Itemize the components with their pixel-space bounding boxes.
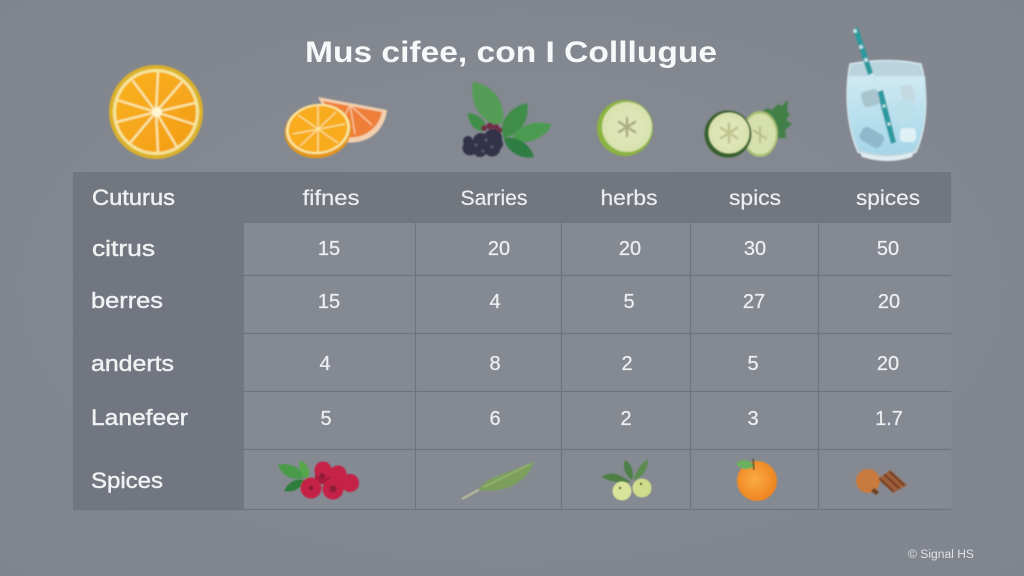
row: citrus	[92, 236, 899, 261]
icon: rosemary sprig	[462, 461, 534, 499]
icon: raspberries	[278, 460, 359, 500]
icon: orange fruit	[736, 459, 777, 501]
row: berres: berres	[91, 288, 163, 313]
header labels: spices	[856, 187, 920, 210]
row: Lanefeer: 2	[620, 408, 632, 430]
row: Lanefeer: Lanefeer	[91, 405, 188, 430]
row: Lanefeer: 3	[747, 408, 759, 430]
row: citrus: 50	[877, 238, 899, 260]
icon: glass of iced water with straw	[847, 27, 926, 161]
header labels: spics	[729, 187, 781, 210]
row: berres: 5	[623, 291, 635, 313]
row: Lanefeer: 1.7	[875, 408, 903, 430]
row: Lanefeer: 5	[320, 408, 332, 430]
icon: orange slice	[109, 65, 203, 159]
footer credit: © Signal HS	[908, 549, 974, 561]
header labels: herbs	[600, 187, 658, 210]
header labels: fifnes	[302, 187, 360, 210]
row: Lanefeer: 6	[489, 408, 501, 430]
icon: cucumber slices with herb	[704, 100, 792, 158]
row: anderts: anderts	[91, 351, 174, 376]
row: citrus: 20	[619, 238, 641, 260]
row: berres	[91, 288, 900, 313]
panel: table	[73, 172, 951, 510]
table body cells	[244, 223, 951, 510]
header labels: Sarries	[460, 187, 528, 210]
header labels	[92, 185, 920, 210]
icon: cinnamon sticks	[856, 469, 907, 495]
row: anderts: 5	[747, 353, 759, 375]
row: citrus: 15	[318, 238, 340, 260]
row: anderts: 20	[877, 353, 899, 375]
row: citrus: citrus	[92, 236, 155, 261]
row: anderts	[91, 351, 899, 376]
row: berres: 20	[878, 291, 900, 313]
row: anderts: 4	[319, 353, 331, 375]
header labels: Cuturus	[92, 185, 175, 210]
row: berres: 27	[743, 291, 765, 313]
row: Lanefeer	[91, 405, 903, 430]
row: anderts: 2	[621, 353, 633, 375]
row label column	[73, 172, 244, 510]
row: anderts: 8	[489, 353, 501, 375]
icon: green berries with leaves	[601, 459, 652, 500]
row: citrus: 30	[744, 238, 766, 260]
row: berres: 4	[489, 291, 501, 313]
row: Spices: Spices	[91, 468, 163, 493]
header row	[73, 172, 951, 223]
row: berres: 15	[318, 291, 340, 313]
icon: cucumber slice	[597, 100, 653, 156]
icon: orange and grapefruit slices	[281, 97, 387, 162]
title: Mus cifee, con I Colllugue	[305, 36, 717, 69]
row: citrus: 20	[488, 238, 510, 260]
icon: mint leaves and blackberries	[462, 82, 552, 158]
